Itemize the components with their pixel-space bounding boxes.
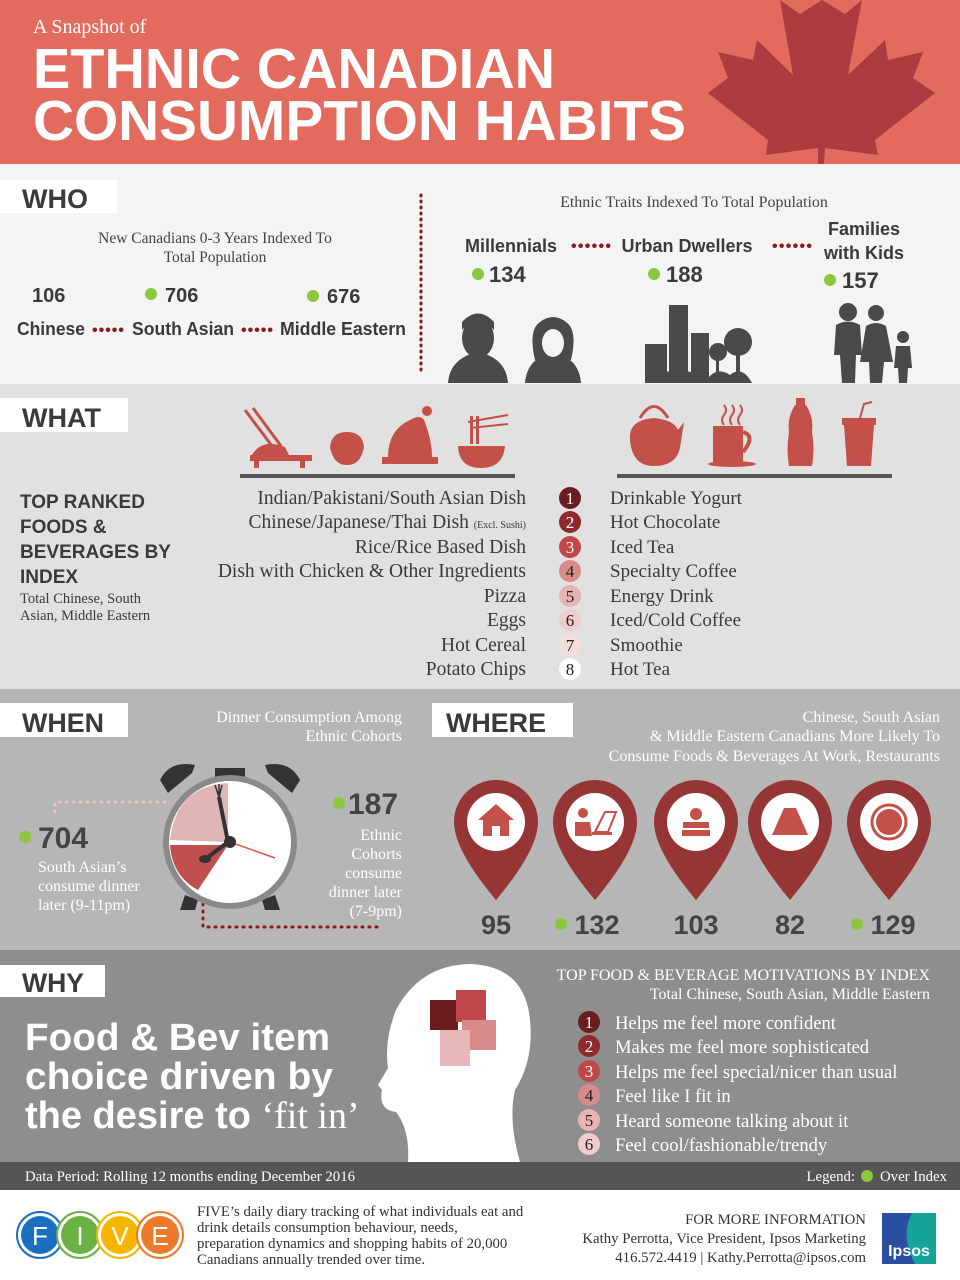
list: motivations: 1 [585, 1013, 593, 1032]
text: top ranked [20, 492, 171, 624]
list: motivations: 2 [585, 1037, 593, 1056]
list: beverages: Smoothie [610, 635, 683, 656]
heading: where [432, 703, 573, 738]
list: beverages [610, 488, 743, 680]
panel: where [432, 703, 940, 940]
stat: 704 [19, 822, 140, 914]
data period bar: Data Period: Rolling 12 months ending December 2016 [25, 1169, 355, 1185]
text: dinner consumption: Dinner Consumption Among [216, 709, 402, 726]
icon: city [645, 305, 752, 383]
text: top ranked: TOP RANKED [20, 492, 145, 513]
data period bar: Legend: [807, 1169, 855, 1185]
list: foods: Rice/Rice Based Dish [355, 537, 526, 558]
stats: new canadians: 676 [327, 286, 360, 308]
stats: new canadians: Chinese [17, 319, 85, 339]
list: foods: Eggs [487, 610, 526, 631]
icon: family [834, 303, 912, 383]
stat: 704: later (9-11pm) [38, 897, 130, 914]
list: foods: Hot Cereal [441, 635, 527, 656]
text: contact: 416.572.4419 | Kathy.Perrotta@ipsos.com [615, 1250, 866, 1266]
text: motivations heading: Total Chinese, South Asian, Middle Eastern [650, 986, 930, 1003]
stats: ethnic traits: •••••• [772, 238, 812, 255]
text: dinner consumption: Ethnic Cohorts [306, 728, 402, 745]
stats: new canadians: ••••• [92, 322, 124, 339]
logo: five: I [76, 1221, 84, 1251]
list: beverages: Hot Chocolate [610, 512, 720, 533]
text: five description: FIVE’s daily diary tracking of what individuals eat and [197, 1204, 523, 1220]
heading: who: WHO [22, 184, 88, 214]
headline: fit in: Food & Bev item [25, 1017, 330, 1059]
stat: 704: consume dinner [38, 878, 140, 895]
text: where description: Consume Foods & Beverages At Work, Restaurants [609, 748, 940, 765]
rank circles: 2 [566, 513, 574, 532]
icon: man [448, 314, 508, 383]
stats: ethnic traits: Families [828, 219, 900, 239]
title: ETHNIC CANADIAN [33, 37, 555, 101]
logo: five: V [111, 1221, 129, 1251]
icon: woman [525, 317, 581, 383]
headline: fit in: choice driven by [25, 1056, 333, 1098]
text: contact: Kathy Perrotta, Vice President, Ipsos Marketing [582, 1231, 867, 1247]
text: top ranked: Asian, Middle Eastern [20, 608, 151, 624]
connector lines [55, 802, 165, 812]
icon: maple leaf [708, 0, 935, 164]
text: new canadians: Total Population [164, 249, 267, 266]
icon: head with puzzle [378, 964, 531, 1162]
list: motivations: Helps me feel special/nicer than usual [615, 1062, 897, 1083]
list: motivations: 3 [585, 1062, 593, 1081]
stat: 704: 704 [38, 822, 88, 855]
text: top ranked: INDEX [20, 567, 78, 588]
stats: new canadians: South Asian [132, 319, 234, 339]
stats: ethnic traits: Millennials [465, 236, 557, 256]
stats: where: 82 [775, 910, 805, 940]
text: top ranked: Total Chinese, South [20, 591, 142, 607]
list: beverages: Drinkable Yogurt [610, 488, 743, 509]
list: motivations: Feel cool/fashionable/trendy [615, 1135, 828, 1156]
rank circles: 5 [566, 587, 574, 606]
rank circles [559, 487, 581, 680]
stats: where: 103 [673, 910, 719, 940]
rank circles: 1 [566, 489, 574, 508]
text: motivations heading: TOP FOOD & BEVERAGE MOTIVATIONS BY INDEX [557, 967, 930, 984]
icons: foods [245, 406, 508, 468]
list: motivations: Makes me feel more sophisticated [615, 1037, 870, 1058]
stat: 187 [329, 788, 403, 920]
panel: why [0, 950, 960, 1162]
stat: 187: Ethnic [360, 827, 402, 844]
list: motivations: Helps me feel more confident [615, 1013, 837, 1034]
subtitle: A Snapshot of [33, 16, 147, 38]
list: motivations: 6 [585, 1135, 593, 1154]
list: foods: Indian/Pakistani/South Asian Dish [257, 488, 526, 509]
headline: fit in [25, 1017, 360, 1137]
stats: ethnic traits: Urban Dwellers [621, 236, 753, 256]
text: contact: FOR MORE INFORMATION [685, 1212, 866, 1228]
list: foods [218, 488, 527, 680]
stats: ethnic traits: 188 [666, 262, 703, 287]
stat: 187: dinner later [329, 884, 403, 901]
header [0, 0, 960, 164]
stats: where: 129 [870, 910, 916, 940]
stat: 187: Cohorts [351, 846, 402, 863]
rank circles: 7 [566, 636, 575, 655]
stats: ethnic traits: with Kids [823, 243, 904, 263]
heading: why [0, 965, 105, 998]
text: five description: preparation dynamics and shopping habits of 20,000 [197, 1236, 507, 1252]
stats: new canadians [17, 285, 406, 339]
text: top ranked: FOODS & [20, 517, 107, 538]
list: beverages: Iced/Cold Coffee [610, 610, 741, 631]
stat: 187: 187 [348, 788, 398, 821]
stats: new canadians: 706 [165, 285, 198, 307]
text: where description: & Middle Eastern Canadians More Likely To [650, 728, 940, 745]
stat: 187: (7-9pm) [350, 903, 402, 920]
stats: ethnic traits: •••••• [571, 238, 611, 255]
stats: new canadians: Middle Eastern [280, 319, 406, 339]
list: foods: Pizza [484, 586, 526, 607]
title [33, 37, 686, 153]
text: five description: drink details consumption behaviour, needs, [197, 1220, 458, 1236]
stat: 704: South Asian’s [38, 859, 126, 876]
rank circles: 8 [566, 660, 574, 679]
data period bar [0, 1162, 960, 1190]
text: ethnic traits: Ethnic Traits Indexed To Total Population [560, 194, 828, 211]
text: where description: Chinese, South Asian [803, 709, 940, 726]
heading: when: WHEN [22, 708, 104, 738]
title: CONSUMPTION HABITS [33, 89, 686, 153]
panel: what [0, 384, 960, 689]
panel: when [0, 689, 960, 950]
list: motivations: 5 [585, 1111, 593, 1130]
stats: where: 132 [574, 910, 620, 940]
logo: ipsos: Ipsos [888, 1243, 930, 1260]
text: top ranked: BEVERAGES BY [20, 542, 171, 563]
icons: beverages [630, 398, 876, 467]
rank circles: 4 [566, 562, 575, 581]
logo: five [17, 1212, 183, 1258]
list: foods: Dish with Chicken & Other Ingredients [218, 561, 526, 582]
list: beverages: Specialty Coffee [610, 561, 737, 582]
heading: when [0, 703, 128, 738]
text: five description: Canadians annually trended over time. [197, 1252, 425, 1268]
stats: new canadians: 106 [32, 285, 65, 307]
list: beverages: Energy Drink [610, 586, 714, 607]
panel: who [0, 164, 960, 384]
stats: where [481, 910, 916, 940]
stats: ethnic traits: 157 [842, 268, 879, 293]
heading: why: WHY [22, 968, 84, 998]
icons in pins [478, 804, 906, 839]
rank circles: 3 [566, 538, 574, 557]
logo: five: E [151, 1221, 169, 1251]
list: motivations [578, 1011, 897, 1156]
list: motivations: Feel like I fit in [615, 1086, 731, 1107]
heading: where: WHERE [446, 708, 546, 738]
text: new canadians: New Canadians 0-3 Years Indexed To [98, 230, 332, 247]
icon: alarm clock [160, 764, 300, 910]
list: foods: Potato Chips [426, 659, 526, 680]
heading: what [0, 398, 128, 433]
logo: ipsos [882, 1213, 936, 1264]
stats: ethnic traits: 134 [489, 262, 526, 287]
logo: five: F [32, 1221, 48, 1251]
list: motivations: 4 [585, 1086, 594, 1105]
heading: what: WHAT [22, 403, 101, 433]
heading: who [0, 180, 117, 214]
data period bar: Over Index [880, 1169, 948, 1185]
headline: fit in: the desire to ‘fit in’ [25, 1095, 360, 1137]
rank circles: 6 [566, 611, 574, 630]
list: beverages: Hot Tea [610, 659, 671, 680]
list: beverages: Iced Tea [610, 537, 675, 558]
list: motivations: Heard someone talking about it [615, 1111, 849, 1132]
stat: 187: consume [345, 865, 402, 882]
pins [454, 780, 931, 900]
stats: new canadians: ••••• [241, 322, 273, 339]
list: foods: Chinese/Japanese/Thai Dish (Excl. Sushi) [248, 512, 526, 533]
stats: ethnic traits [465, 219, 904, 293]
stats: where: 95 [481, 910, 511, 940]
